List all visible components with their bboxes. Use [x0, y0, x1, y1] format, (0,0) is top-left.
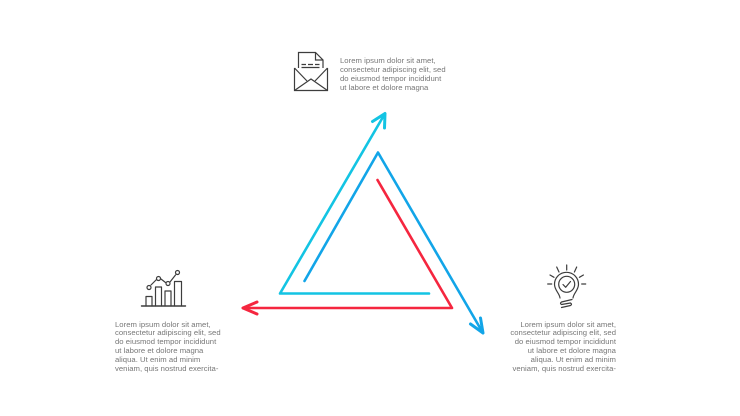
text block: top: do eiusmod tempor incididunt — [340, 74, 441, 83]
arrow: cyan — [280, 114, 429, 294]
text block: left: Lorem ipsum dolor sit amet, — [115, 320, 211, 328]
text block: left: do eiusmod tempor incididunt — [115, 337, 216, 346]
text block: right: do eiusmod tempor incididunt — [515, 337, 616, 346]
icon: envelope with letter — [294, 52, 328, 90]
text block: right: ut labore et dolore magna — [528, 346, 616, 355]
text block: left: consectetur adipiscing elit, sed — [115, 328, 221, 337]
text block: right: consectetur adipiscing elit, sed — [510, 328, 616, 337]
text block: right: veniam, quis nostrud exercita- — [513, 364, 616, 373]
arrow: blue — [304, 152, 483, 333]
text block: top: ut labore et dolore magna — [340, 83, 428, 92]
text block: top: Lorem ipsum dolor sit amet, — [340, 56, 436, 65]
text block: left — [115, 320, 221, 373]
text block: left: ut labore et dolore magna — [115, 346, 203, 355]
text block: left: veniam, quis nostrud exercita- — [115, 364, 218, 373]
text block: right: aliqua. Ut enim ad minim — [531, 355, 616, 364]
text block: right — [510, 320, 616, 373]
text block: left: aliqua. Ut enim ad minim — [115, 355, 200, 364]
icon: light bulb with check — [548, 265, 586, 308]
text block: top: consectetur adipiscing elit, sed — [340, 65, 446, 74]
text block: right: Lorem ipsum dolor sit amet, — [520, 320, 616, 328]
text block: top — [340, 56, 446, 92]
icon: bar and line chart — [142, 270, 186, 306]
arrow: red — [243, 180, 452, 314]
chart: triangle of arrows — [243, 114, 483, 333]
